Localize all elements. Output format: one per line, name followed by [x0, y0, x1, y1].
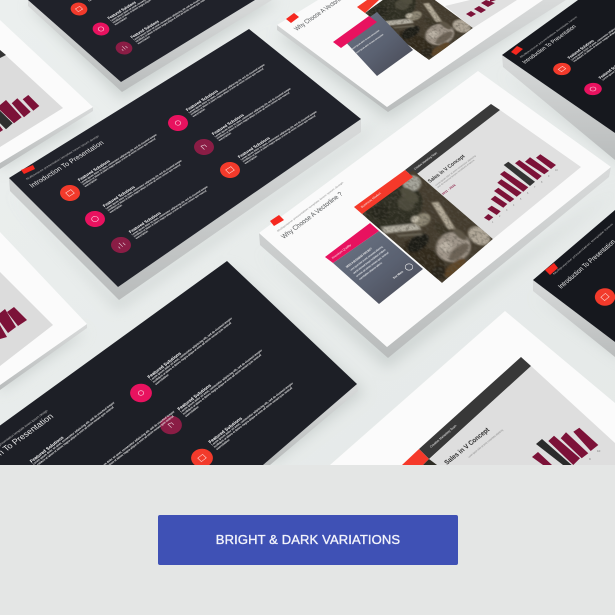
feature row 1 [56, 130, 166, 204]
grey chart panel [0, 50, 63, 147]
feature row 2: Featured Solutions [176, 383, 213, 411]
blue text panel [341, 12, 413, 76]
heading: Why Choose A Vectorline ? [280, 191, 345, 240]
chart axis labels: 2 [499, 215, 501, 218]
red header label: Business Market [360, 192, 382, 209]
bars [0, 95, 39, 132]
feature row 4 [164, 60, 274, 134]
card face [277, 0, 543, 107]
heading: Introduction To Presentation [522, 24, 578, 65]
panel copy: sed do eiusmod tempor incididunt ut labore [352, 248, 387, 275]
card: main bright slide [259, 71, 611, 358]
chart axis labels [492, 169, 558, 224]
feature row 4: exercitation [191, 107, 206, 118]
feature row 1: exercitation [83, 177, 98, 188]
red tag [511, 46, 523, 55]
red header [354, 170, 413, 214]
card: top-right dark slide [502, 0, 615, 160]
panel copy [349, 245, 390, 281]
feature icon [591, 285, 615, 309]
photo [353, 165, 496, 288]
feature row 5: incididunt ut labore et dolore magna aliqua ut enim ad minim veniam quis nostrud [215, 91, 291, 140]
subtitle: Multipurpose presentation template lorem [552, 222, 615, 276]
bar chart [532, 428, 598, 465]
card edge [263, 384, 358, 465]
card edge [259, 167, 611, 358]
red tag [270, 215, 284, 226]
button: bright and dark variations [158, 515, 458, 565]
feature row 3: Featured Solutions [129, 19, 161, 39]
card edge [0, 107, 93, 169]
feature row 3: incididunt ut labore et dolore magna aliqua ut enim ad minim veniam quis nostrud [132, 189, 208, 238]
feature row 1: Lorem ipsum dolor sit amet, consectetur adipiscing elit, sed do eiusmod tempor [149, 316, 234, 381]
feature row 2: exercitation [108, 203, 123, 214]
feature row 3: exercitation [136, 35, 151, 45]
feature row 1: exercitation [154, 373, 170, 386]
chart axis labels [589, 449, 601, 461]
grey chart panel [413, 110, 581, 239]
chart axis labels: 8 [541, 181, 543, 184]
feature row 2: exercitation [184, 405, 200, 418]
feature row 1: incididunt ut labore et dolore magna aliqua ut enim ad minim veniam quis nostrud [152, 321, 232, 384]
subtitle: Multipurpose presentation template lorem [519, 15, 579, 59]
chart date: 2011 - 2016 [441, 183, 457, 196]
card face [330, 311, 615, 465]
panel copy: Lorem ipsum dolor sit amet, consectetur adipiscing [349, 245, 384, 272]
bars [0, 307, 27, 339]
feature row 2 [155, 345, 273, 438]
grey chart panel [0, 272, 53, 366]
feature row 5: exercitation [217, 131, 232, 142]
mockup scene [0, 0, 615, 465]
card face [28, 0, 255, 82]
pink header [333, 16, 377, 48]
chart axis labels: 10 [555, 169, 558, 172]
feature row 3: incididunt ut labore et dolore magna aliqua ut enim ad minim veniam quis nostrud [213, 386, 293, 449]
grey chart panel [423, 366, 615, 465]
feature row 2: Featured Solutions [102, 184, 137, 208]
card edge [277, 0, 566, 112]
feature row 1 [125, 313, 243, 406]
card face [0, 20, 93, 163]
feature row 5: Featured Solutions [211, 112, 246, 136]
chart copy: Lorem ipsum dolor sit amet, consectetur adipiscing [467, 428, 504, 459]
card: top-middle bright slide [277, 0, 566, 112]
red tag [545, 263, 558, 275]
feature row 3: Lorem ipsum dolor sit amet, consectetur adipiscing elit, sed do eiusmod tempor [210, 381, 295, 446]
feature row 1: incididunt ut labore et dolore magna aliqua ut enim ad minim veniam quis nostrud [81, 137, 157, 186]
feature row 3: Featured Solutions [207, 416, 244, 444]
feature row 1: Featured Solutions [77, 158, 112, 182]
icon: arrow circle [405, 264, 413, 270]
feature row 3: exercitation [134, 229, 149, 240]
card: right dark slide [533, 210, 615, 357]
feature row 6 [216, 107, 326, 181]
dark header bar [0, 50, 6, 58]
feature row 5 [92, 409, 178, 477]
feature row 1 [67, 0, 171, 18]
feature row 2: Lorem ipsum dolor sit amet, consectetur adipiscing elit, sed do eiusmod tempor [179, 348, 264, 413]
chart axis labels: 10 [597, 449, 601, 453]
feature row 3: exercitation [215, 438, 231, 451]
feature row 1 [549, 20, 615, 78]
feature row 4: Featured Solutions [185, 88, 220, 112]
pink header [325, 223, 379, 263]
bar chart [484, 154, 556, 221]
card edge [28, 0, 272, 92]
photo corner [423, 459, 437, 465]
background surface [0, 0, 615, 465]
feature row 3 [112, 0, 216, 57]
feature row 5 [190, 84, 300, 158]
card: bottom dark slide [0, 261, 358, 481]
heading: Introduction To Presentation [29, 140, 106, 189]
chart copy: sed do eiusmod tempor incididunt ut labore [436, 159, 476, 189]
card: lower-left bright slide [0, 232, 87, 390]
red tag [21, 165, 35, 174]
card face [533, 210, 615, 342]
chart axis labels: 4 [513, 204, 515, 207]
panel heading: NEED A BUSINESS PROJECT [345, 247, 373, 269]
chart axis labels: 7 [534, 186, 536, 189]
card face [9, 29, 361, 287]
dark header label: Creative Marketing Team [429, 424, 458, 449]
red header [402, 449, 429, 465]
feature row 3 [107, 182, 217, 256]
feature row 4: Lorem ipsum dolor sit amet, consectetur adipiscing elit, sed do eiusmod tempor [187, 62, 267, 114]
subtitle: Multipurpose presentation template lorem ipsum design [25, 134, 100, 181]
red tag [286, 13, 299, 23]
feature row 2: incididunt ut labore et dolore magna aliqua ut enim ad minim veniam quis nostrud [106, 163, 182, 212]
feature row 4: Lorem ipsum dolor sit amet, consectetur adipiscing elit, sed do eiusmod tempor [32, 400, 116, 465]
card: left bright slide [0, 20, 93, 169]
card: bottom-right bright slide [330, 311, 615, 466]
button: bright and dark variations: BRIGHT & DARK VARIATIONS [216, 532, 400, 547]
feature row 2: exercitation [113, 16, 128, 26]
chart axis labels: 6 [527, 192, 529, 195]
card shadows [0, 0, 615, 465]
feature row 4: incididunt ut labore et dolore magna aliqua ut enim ad minim veniam quis nostrud [189, 67, 265, 116]
feature row 1: Featured Solutions [566, 38, 596, 60]
chart axis labels: 9 [548, 175, 550, 178]
blue text panel [333, 231, 423, 304]
card edge [533, 280, 615, 357]
feature row 3 [186, 378, 304, 471]
card face [0, 261, 357, 465]
feature row 6: Lorem ipsum dolor sit amet, consectetur adipiscing elit, sed do eiusmod tempor [239, 109, 319, 161]
card edge [0, 324, 87, 390]
feature row 6: incididunt ut labore et dolore magna aliqua ut enim ad minim veniam quis nostrud [241, 114, 317, 163]
chart heading: Sales in V Concept [427, 154, 467, 184]
feature row 6: exercitation [243, 154, 258, 165]
chart axis labels: 9 [589, 457, 591, 461]
panel copy line: Lorem ipsum dolor sit amet consectetur [354, 33, 385, 55]
card face [0, 232, 87, 385]
card face [502, 0, 615, 133]
dark header bar [419, 357, 531, 459]
feature row 4: Featured Solutions [29, 435, 65, 464]
feature row 2 [580, 58, 615, 98]
panel copy: ut enim ad minim veniam quis nostrud [355, 251, 390, 278]
feature row 1: Featured Solutions [146, 351, 183, 379]
chart copy: Lorem ipsum dolor sit amet, consectetur adipiscing [434, 154, 477, 187]
card edge [9, 119, 361, 300]
feature row 2: Lorem ipsum dolor sit amet, consectetur adipiscing elit, sed do eiusmod tempor [104, 158, 184, 210]
feature row 3: Featured Solutions [128, 210, 163, 234]
dark header bar [405, 104, 500, 177]
dark bar [0, 111, 13, 129]
feature row 6: Featured Solutions [237, 135, 272, 159]
chart axis labels: 5 [520, 198, 522, 201]
feature row 2: incididunt ut labore et dolore magna aliqua ut enim ad minim veniam quis nostrud [182, 353, 262, 416]
crimson bars [466, 0, 496, 17]
subtitle: Multipurpose presentation template lorem ipsum design [276, 180, 345, 233]
pink header label: Premium Quality [331, 243, 353, 260]
feature row 1: Lorem ipsum dolor sit amet, consectetur adipiscing elit, sed do eiusmod tempor [79, 132, 159, 184]
feature row 2 [89, 0, 193, 38]
see more link: See More [392, 270, 405, 280]
card edge [502, 55, 615, 160]
chart axis labels: 3 [506, 209, 508, 212]
red header [357, 0, 379, 13]
card face [259, 71, 611, 347]
chart axis labels: 1 [492, 221, 494, 224]
panel copy: exercitation ullamco laboris [358, 261, 383, 281]
card: top-left dark slide [28, 0, 272, 92]
dark header label: Creative Marketing Team [413, 151, 438, 171]
grey chart panel [445, 0, 517, 28]
feature row 3: Lorem ipsum dolor sit amet, consectetur adipiscing elit, sed do eiusmod tempor [130, 184, 210, 236]
card: main dark slide [9, 29, 361, 300]
photo [358, 0, 476, 64]
panel: footer [0, 465, 615, 615]
panel copy: Lorem ipsum dolor sit amet consectetur [350, 29, 381, 51]
feature row 5: Lorem ipsum dolor sit amet, consectetur adipiscing elit, sed do eiusmod tempor [213, 86, 293, 138]
feature row 2 [81, 156, 191, 230]
